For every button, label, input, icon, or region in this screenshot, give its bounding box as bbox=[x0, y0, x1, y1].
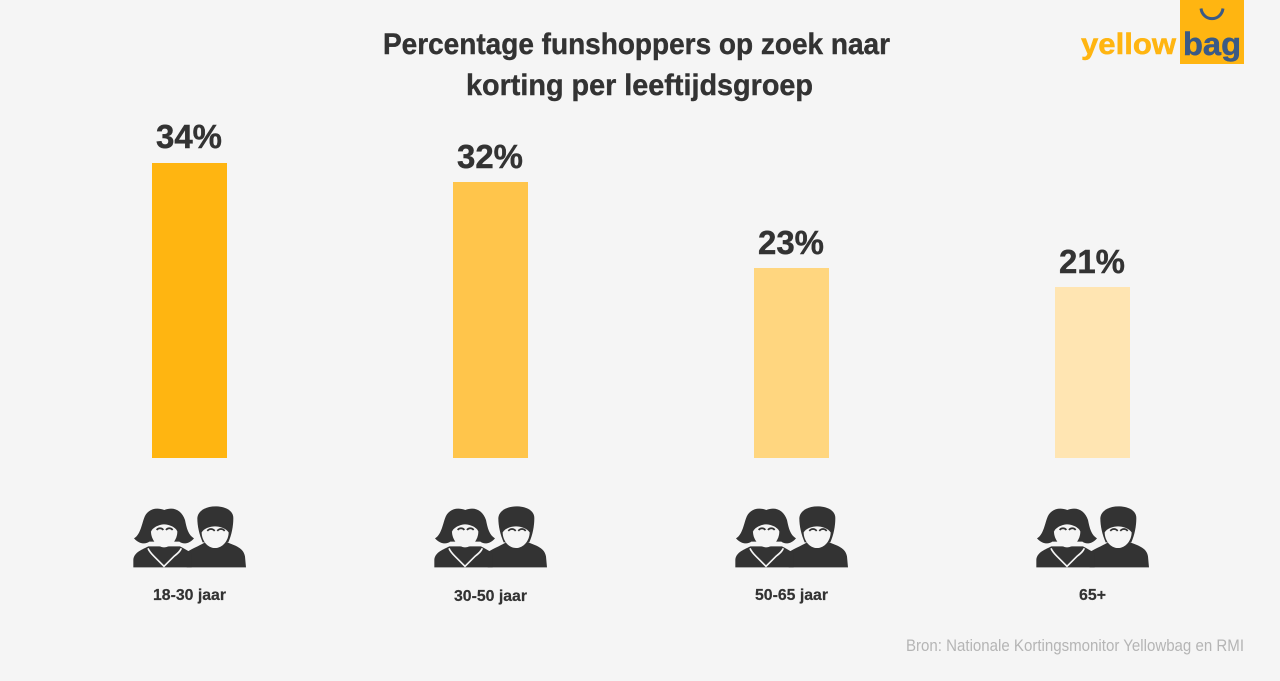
icon: people bbox=[735, 506, 848, 567]
logo: yellowbag: bag bbox=[1183, 26, 1241, 62]
value 23%: 23% bbox=[758, 224, 824, 261]
bar 30-50 jaar bbox=[453, 182, 528, 458]
column: 30-50 jaar bbox=[434, 138, 547, 605]
source note: Bron: Nationale Kortingsmonitor Yellowbag en RMI bbox=[906, 637, 1244, 655]
logo: yellowbag: yellow bbox=[1081, 28, 1177, 61]
title: korting per leeftijdsgroep bbox=[466, 69, 813, 102]
value 21%: 21% bbox=[1059, 243, 1125, 280]
bar 50-65 jaar bbox=[754, 268, 829, 458]
column: 65+ bbox=[1036, 243, 1149, 604]
label 30-50 jaar: 30-50 jaar bbox=[454, 588, 527, 605]
title: Percentage funshoppers op zoek naar bbox=[383, 28, 890, 61]
icon: people bbox=[133, 506, 246, 567]
value 34%: 34% bbox=[156, 118, 222, 155]
icon: people bbox=[1036, 506, 1149, 567]
bar 65+ bbox=[1055, 287, 1130, 458]
logo: yellowbag bbox=[1081, 0, 1244, 64]
value 32%: 32% bbox=[457, 138, 523, 175]
label 65+: 65+ bbox=[1079, 587, 1106, 604]
label 50-65 jaar: 50-65 jaar bbox=[755, 587, 828, 604]
column: 50-65 jaar bbox=[735, 224, 848, 604]
title bbox=[383, 28, 890, 102]
column: 18-30 jaar bbox=[133, 118, 246, 604]
bar 18-30 jaar bbox=[152, 163, 227, 458]
label 18-30 jaar: 18-30 jaar bbox=[153, 587, 226, 604]
icon: people bbox=[434, 506, 547, 567]
